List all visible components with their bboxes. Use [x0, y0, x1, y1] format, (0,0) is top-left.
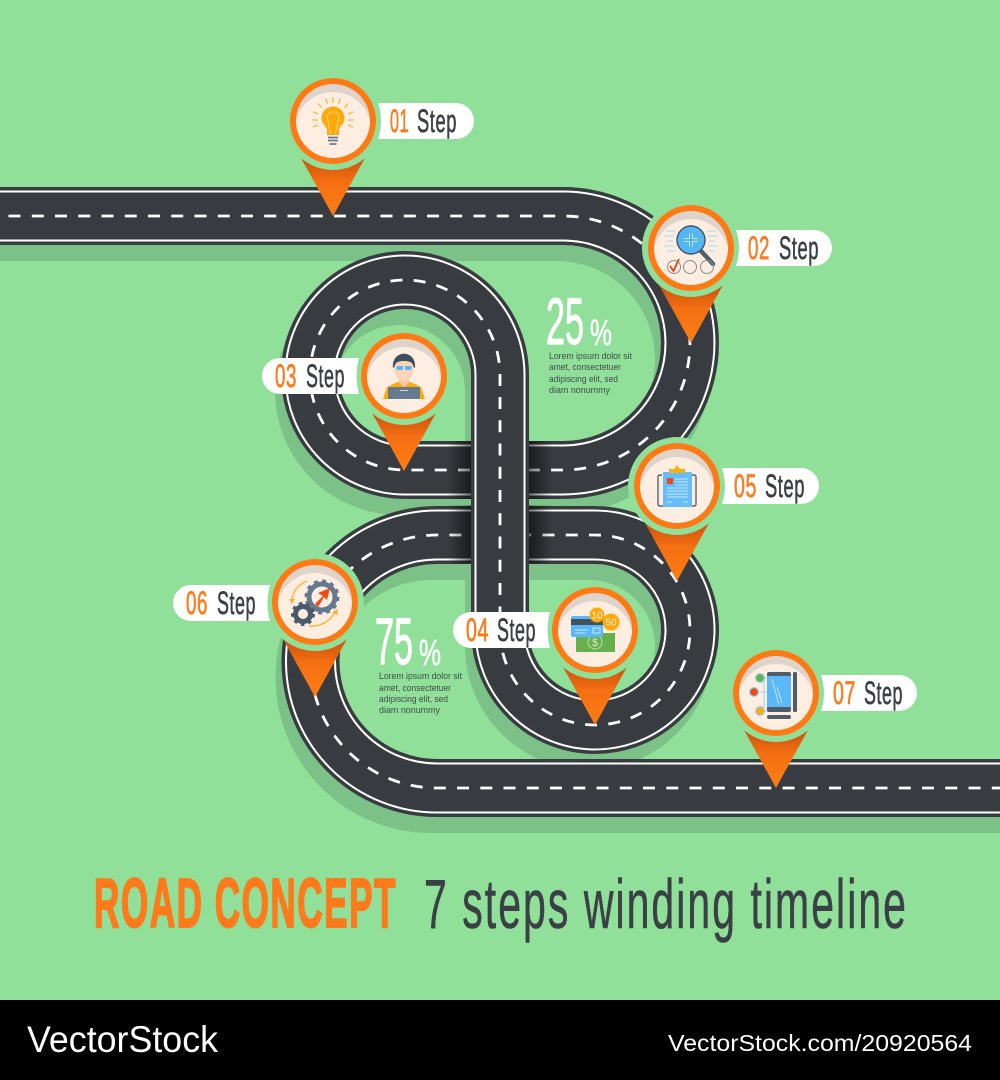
- step 02 label: [736, 230, 832, 266]
- step 07 label: [821, 675, 917, 711]
- step 03 label: Step: [306, 358, 345, 394]
- icon: clipboard: [658, 465, 696, 507]
- step 06 label: Step: [217, 585, 256, 621]
- step 04 pin: [453, 581, 644, 725]
- winding road: [0, 216, 1000, 788]
- icon: light bulb: [312, 97, 354, 144]
- icon: money and credit card: [571, 608, 620, 652]
- icon: person at laptop: [383, 354, 425, 399]
- watermark bar: [0, 1000, 1000, 1080]
- watermark bar: VectorStock.com/20920564: [668, 1030, 972, 1056]
- step 07 label: 07: [833, 675, 856, 711]
- stat: 25 percent: adipiscing elit, sed: [549, 374, 618, 384]
- step 01 label: [378, 103, 474, 139]
- step 04 label: [453, 612, 550, 648]
- step 02 pin: [642, 199, 832, 343]
- step 01 pin: [284, 72, 474, 216]
- step 06 label: 06: [186, 585, 208, 621]
- title: ROAD CONCEPT: [94, 864, 397, 942]
- stat: 75 percent: [375, 604, 462, 715]
- stat: 25 percent: diam nonummy: [549, 385, 610, 395]
- stat: 75 percent: diam nonummy: [379, 705, 440, 715]
- icon: money and credit card: 10: [591, 610, 603, 622]
- stat: 75 percent: %: [419, 632, 441, 673]
- step 01 label: Step: [417, 103, 457, 139]
- stat: 25 percent: Lorem ipsum dolor sit: [549, 351, 632, 361]
- step 05 label: 05: [734, 468, 757, 504]
- step 05 label: Step: [765, 468, 805, 504]
- stat: 25 percent: amet, consectetuer: [549, 362, 621, 372]
- stat: 75 percent: adipiscing elit, sed: [379, 694, 448, 704]
- step 02 label: Step: [779, 230, 819, 266]
- step 03 pin: [262, 327, 453, 471]
- step 05 label: [722, 468, 819, 504]
- step 07 pin: [727, 644, 917, 788]
- stat: 75 percent: amet, consectetuer: [379, 683, 451, 693]
- step 07 label: Step: [864, 675, 903, 711]
- overpass road section: [471, 397, 529, 600]
- step 06 pin: [173, 553, 364, 697]
- watermark bar: VectorStock: [27, 1019, 218, 1060]
- stat: 75 percent: Lorem ipsum dolor sit: [379, 671, 462, 681]
- icon: magnifier and checklist: [664, 226, 718, 274]
- road shadow: [0, 232, 1000, 804]
- step 03 label: 03: [275, 358, 297, 394]
- step 03 label: [262, 358, 359, 394]
- overpass shadows: [447, 441, 553, 564]
- step 05 pin: [628, 437, 819, 581]
- icon: smartphone with connected nodes: [749, 672, 797, 719]
- icon: gears with arrow: [289, 581, 338, 626]
- icon: money and credit card: 50: [605, 618, 617, 628]
- step 02 label: 02: [748, 230, 770, 266]
- stat: 25 percent: %: [590, 312, 612, 353]
- step 04 label: 04: [466, 612, 489, 648]
- step 06 label: [173, 585, 270, 621]
- step 04 label: Step: [497, 612, 536, 648]
- icon: money and credit card: $: [592, 637, 598, 649]
- stat: 25 percent: 25: [546, 284, 584, 358]
- stat: 75 percent: 75: [375, 604, 413, 678]
- stat: 25 percent: [546, 284, 632, 395]
- step 01 label: 01: [390, 103, 409, 139]
